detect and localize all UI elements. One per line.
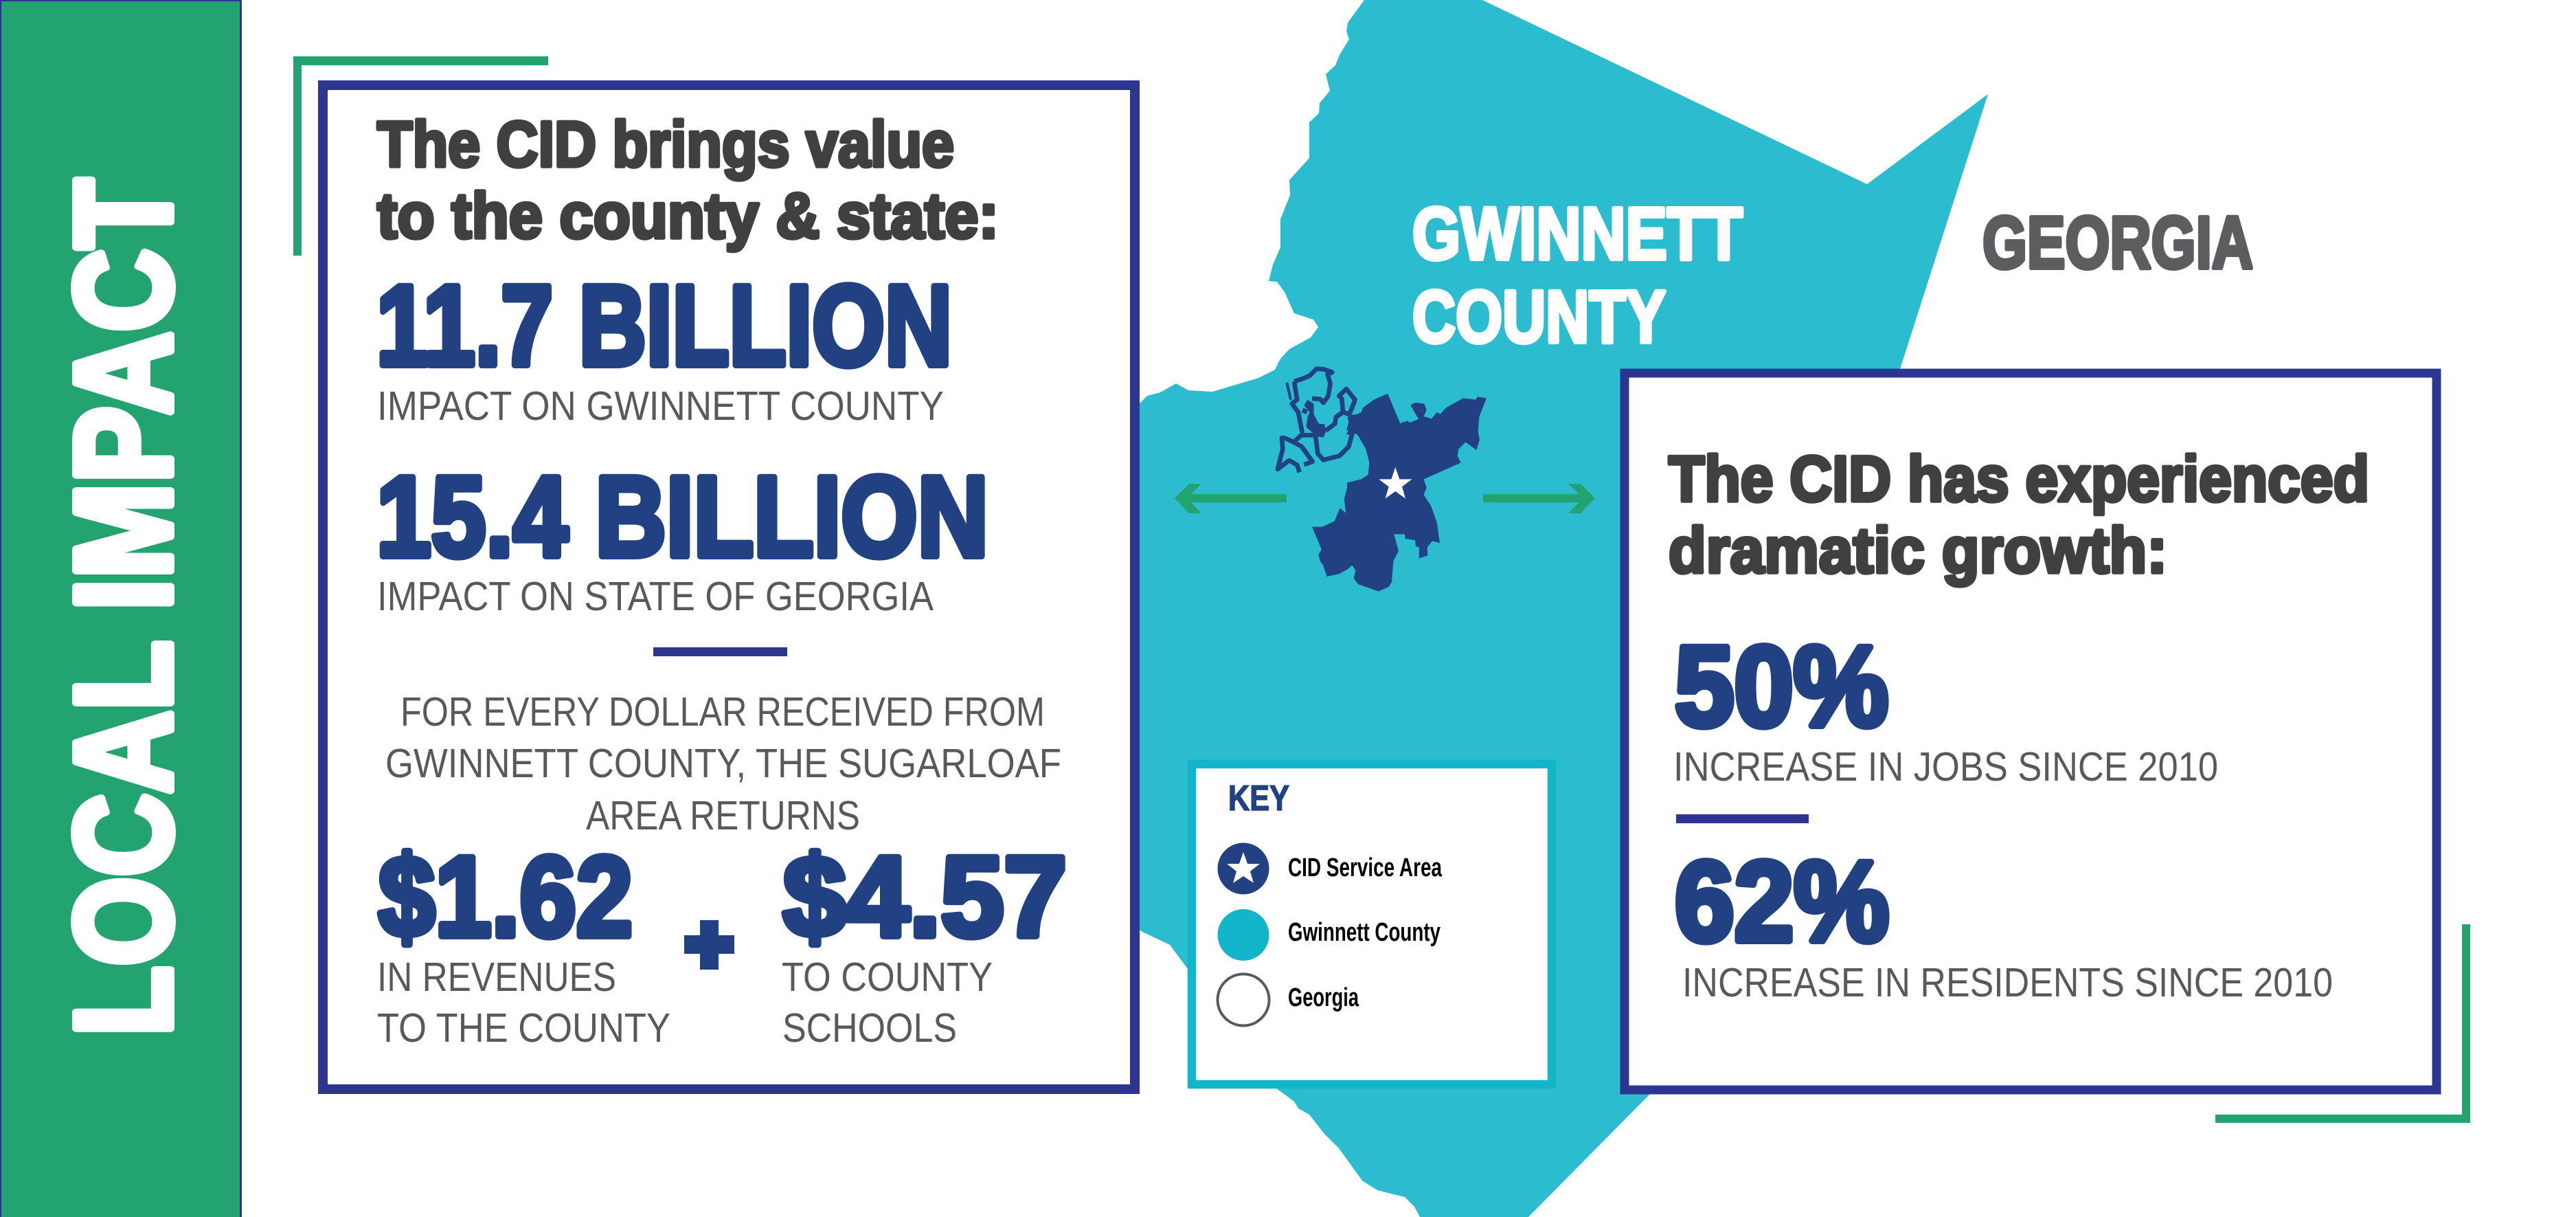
stat: 1.62 in revenues: IN REVENUES <box>377 954 616 1000</box>
heading: dramatic growth: dramatic growth: <box>1669 514 2167 586</box>
text block: every dollar received: AREA RETURNS <box>586 793 860 838</box>
stat: 11.7 billion: 11.7 BILLION <box>376 263 952 390</box>
stat: 4.57 to county schools <box>782 834 1067 1051</box>
map: Gwinnett County shape <box>1133 0 1988 1217</box>
stat: 11.7 billion: IMPACT ON GWINNETT COUNTY <box>377 383 944 429</box>
stat: 4.57 to county schools: SCHOOLS <box>782 1005 957 1051</box>
heading: value to the county and state <box>377 108 999 252</box>
panel: map key <box>1192 764 1552 1084</box>
title: local impact: LOCAL IMPACT <box>47 179 200 1036</box>
stat: 1.62 in revenues: $1.62 <box>379 834 633 961</box>
stat: 50 percent jobs: INCREASE IN JOBS SINCE 2010 <box>1673 744 2218 790</box>
stat: 15.4 billion: 15.4 BILLION <box>376 454 988 581</box>
panel: dramatic growth <box>1625 373 2437 1090</box>
heading: dramatic growth: The CID has experienced <box>1669 443 2369 515</box>
icon: plus <box>684 920 734 970</box>
map: CID service area <box>1278 369 1487 592</box>
heading: key: KEY <box>1228 779 1289 818</box>
legend item: Georgia: Georgia <box>1288 983 1359 1012</box>
text block: every dollar received: FOR EVERY DOLLAR RECEIVED FROM <box>400 689 1045 735</box>
divider <box>653 647 787 656</box>
stat: 15.4 billion <box>376 454 988 619</box>
label: Gwinnett County: GWINNETT <box>1412 192 1743 275</box>
heading: value to the county and state: The CID brings value <box>377 108 954 180</box>
bracket: bottom right green corner <box>2215 924 2470 1123</box>
stat: 4.57 to county schools: $4.57 <box>783 834 1067 961</box>
stat: 1.62 in revenues <box>377 834 670 1051</box>
stat: 50 percent jobs: 50% <box>1675 623 1888 750</box>
label: Gwinnett County <box>1412 192 1743 358</box>
shape: service area road junction <box>1304 400 1326 438</box>
heading: dramatic growth <box>1669 443 2369 586</box>
stat: 4.57 to county schools: TO COUNTY <box>782 954 993 1000</box>
legend item: CID service area <box>1217 842 1443 895</box>
legend item: CID service area: CID Service Area <box>1288 853 1443 882</box>
panel: county and state value <box>323 85 1135 1089</box>
panel: sidebar with vertical title <box>0 0 242 1217</box>
heading: value to the county and state: to the county & state: <box>377 179 999 252</box>
stat: 15.4 billion: IMPACT ON STATE OF GEORGIA <box>377 574 934 619</box>
legend item: Gwinnett County: Gwinnett County <box>1288 918 1440 947</box>
label: Gwinnett County: COUNTY <box>1412 275 1666 358</box>
bracket: top left green corner <box>293 56 548 256</box>
icon: white star <box>1379 467 1412 498</box>
stat: 62 percent residents: 62% <box>1675 838 1889 965</box>
arrow: right <box>1483 484 1595 513</box>
stat: 62 percent residents: INCREASE IN RESIDENTS SINCE 2010 <box>1682 960 2333 1005</box>
stat: 62 percent residents <box>1675 838 2333 1005</box>
label: Georgia: GEORGIA <box>1982 201 2253 284</box>
legend item: Gwinnett County <box>1217 909 1440 961</box>
arrow: left <box>1175 484 1287 513</box>
stat: 1.62 in revenues: TO THE COUNTY <box>377 1005 670 1051</box>
shape: service area main body <box>1312 394 1487 592</box>
text block: every dollar received: GWINNETT COUNTY, THE SUGARLOAF <box>385 741 1061 786</box>
shape: service area road network <box>1278 369 1355 472</box>
legend item: Georgia <box>1217 974 1359 1025</box>
stat: 11.7 billion <box>376 263 952 429</box>
stat: 50 percent jobs <box>1673 623 2218 790</box>
divider <box>1676 814 1809 823</box>
text block: every dollar received <box>385 689 1061 838</box>
